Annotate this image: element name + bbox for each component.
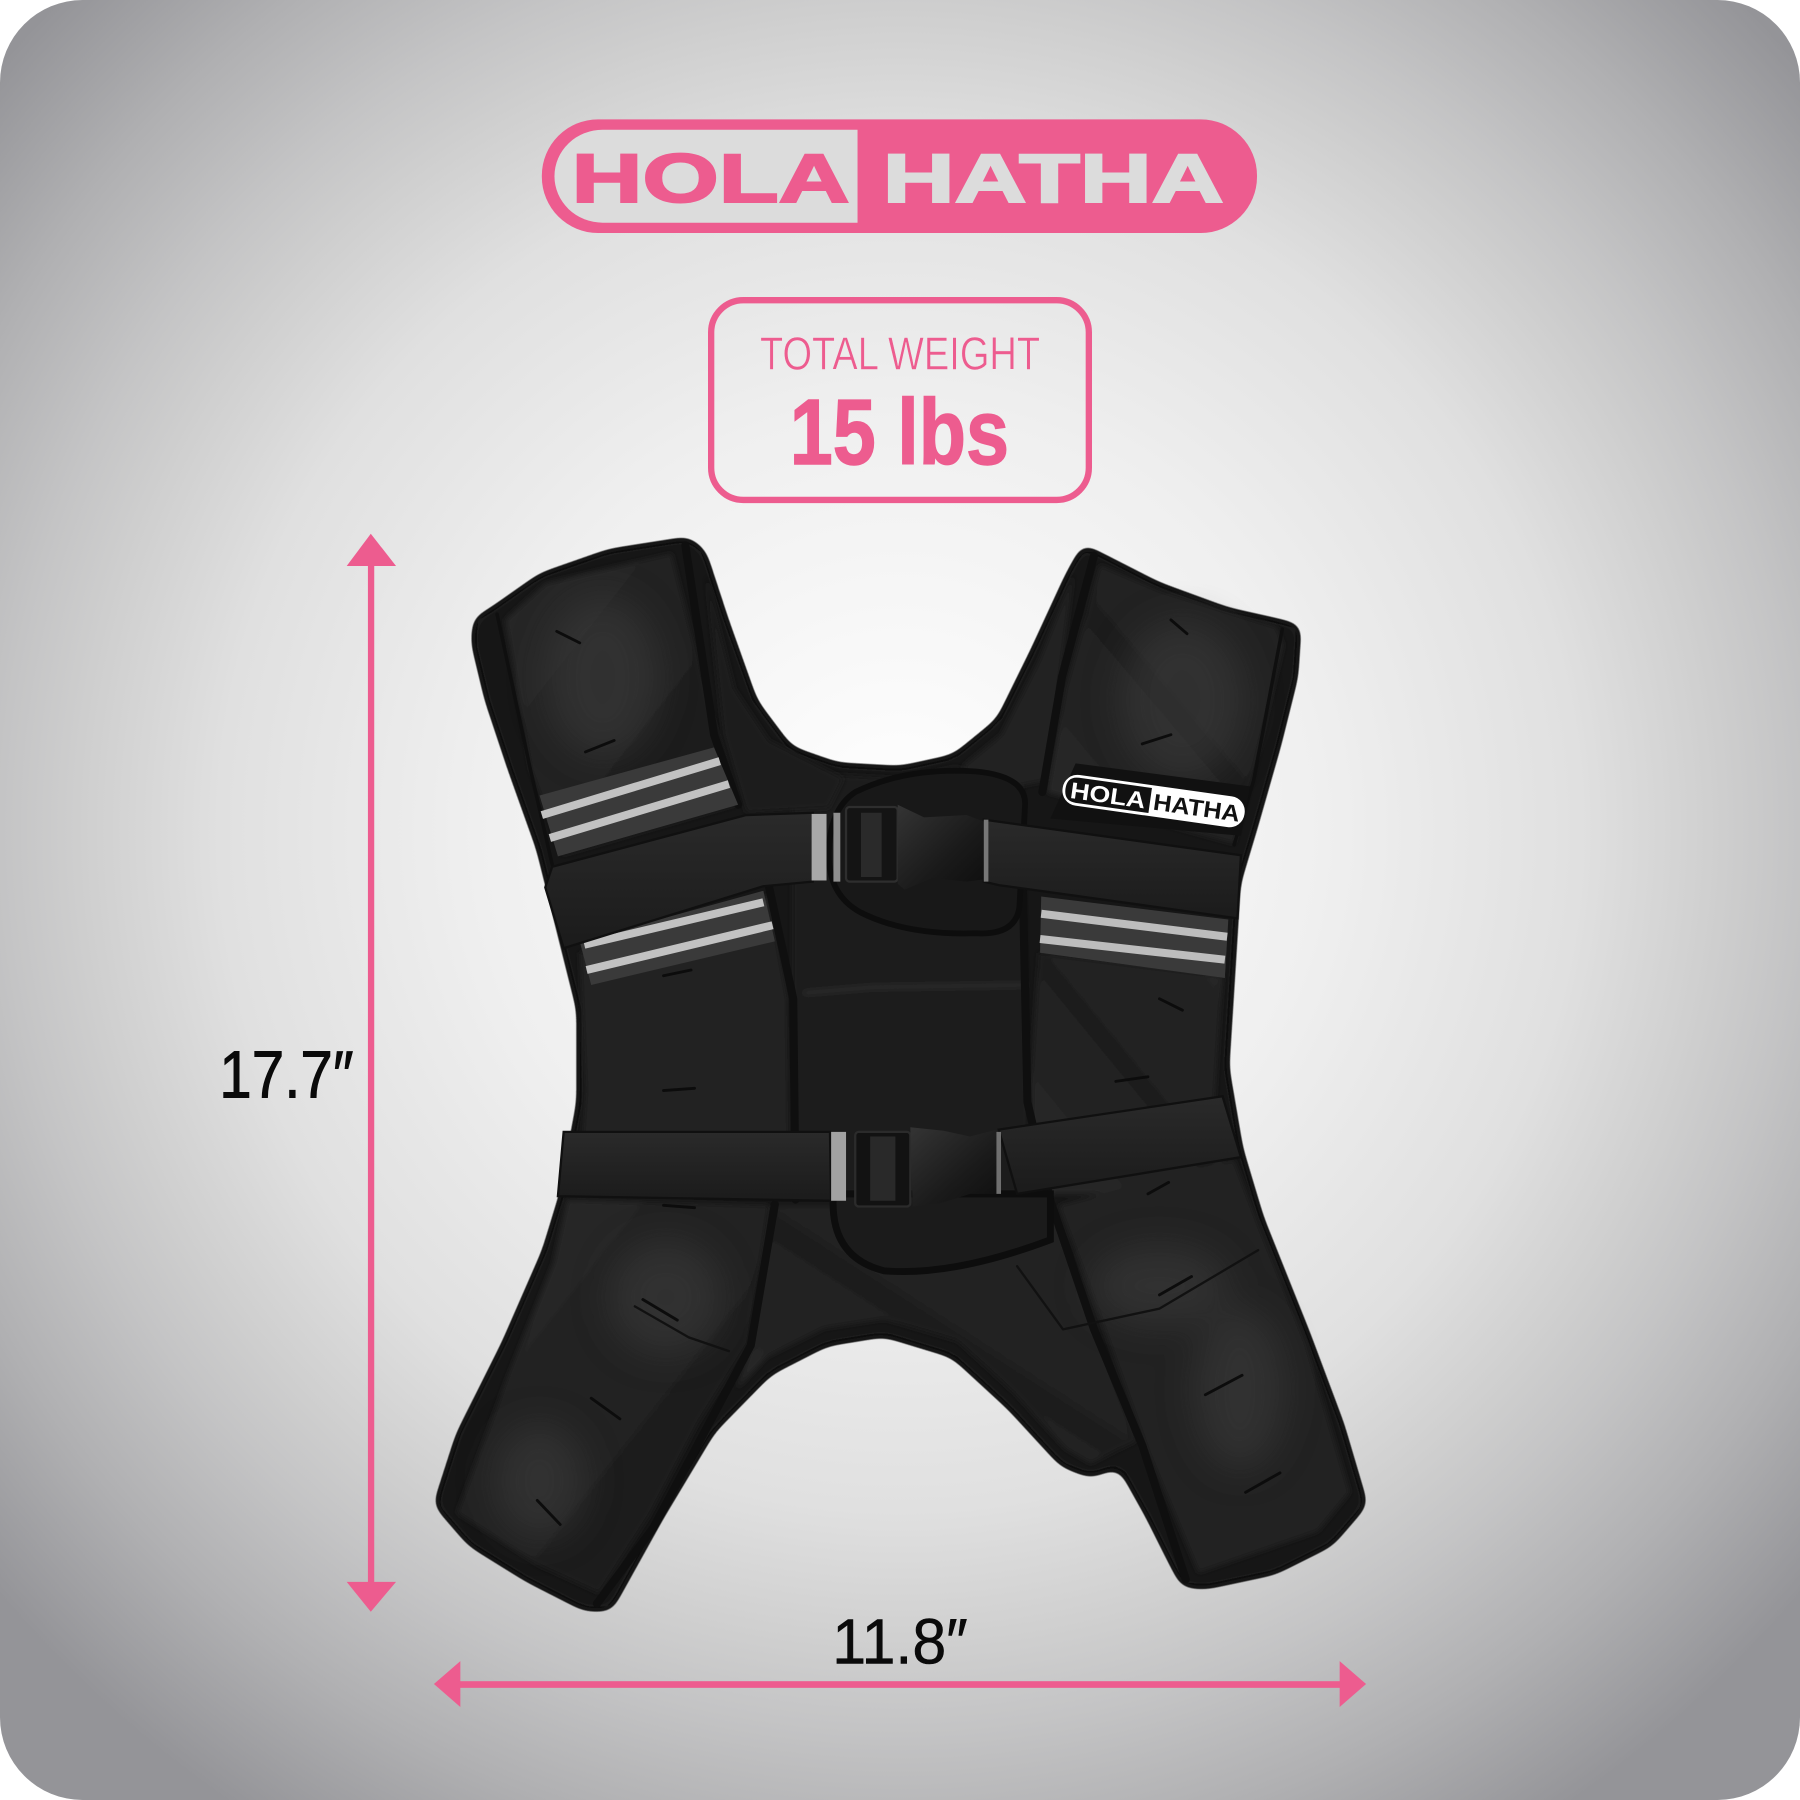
lower left reflective band [580,891,775,985]
lower strap left [558,1132,831,1201]
chest flap [829,771,1025,933]
neck panels [706,574,1073,813]
quilted tufts [537,620,1280,1524]
weighted vest [433,536,1368,1612]
upper strap left [545,813,813,948]
seams and trim [497,545,1282,1604]
lower flap [833,1194,1050,1272]
lower strap right [999,1096,1241,1194]
brand label patch [1050,763,1250,836]
height arrow [347,534,396,1612]
right reflective band [1040,897,1228,978]
label word HATHA: HATHA [1152,789,1242,827]
label word HOLA: HOLA [1069,777,1147,813]
upper left reflective band [540,747,738,856]
upper strap right [984,820,1241,918]
total weight label: TOTAL WEIGHT [760,328,1040,380]
height label: 17.7″ [219,1038,354,1112]
lower buckle [831,1127,1001,1207]
total weight box [711,300,1089,500]
center back panel [737,767,1136,1464]
width arrow [434,1661,1366,1707]
vest silhouette [433,536,1368,1612]
weight value: 15 lbs [790,380,1009,484]
upper buckle [812,805,988,890]
brand logo [542,119,1257,233]
width label: 11.8″ [832,1605,968,1677]
logo word HATHA: HATHA [883,140,1224,217]
logo word HOLA: HOLA [572,140,849,217]
shoulder and side panels [457,553,1350,1593]
fabric sheen [494,597,1286,1538]
